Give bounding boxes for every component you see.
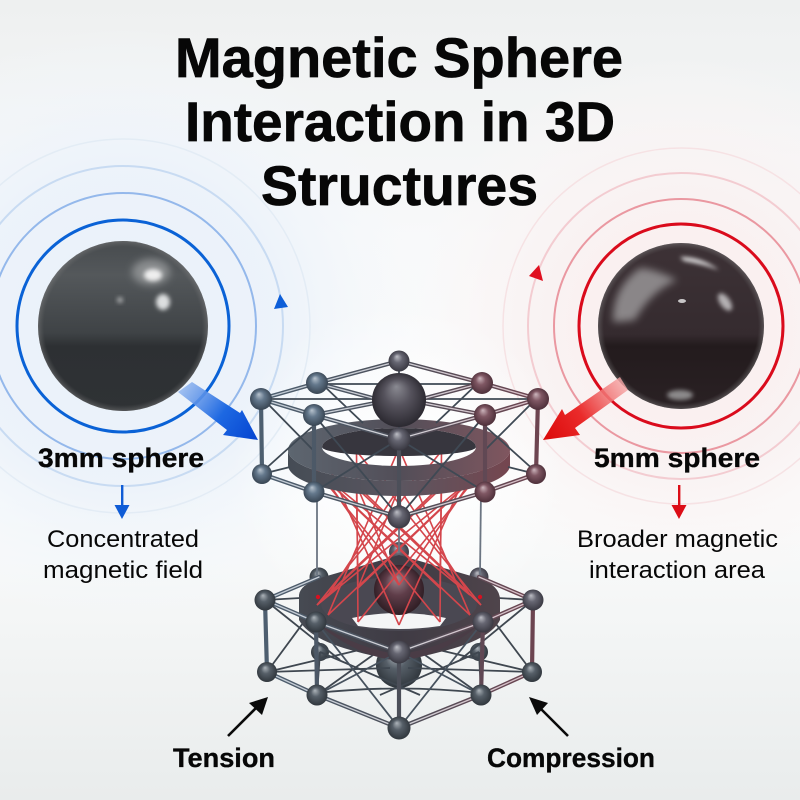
text: concentrated magnetic field: Concentrated	[47, 526, 199, 553]
upper lattice nodes	[250, 350, 549, 528]
arrow: blue down	[114, 485, 130, 519]
arrow: blue force into structure	[178, 382, 258, 440]
label: 5mm sphere: 5mm sphere	[594, 443, 760, 473]
title: Structures	[261, 154, 538, 217]
lower lattice central sphere	[374, 565, 424, 615]
label: 3mm sphere: 3mm sphere	[38, 443, 204, 473]
icon: red rotation triangle	[529, 265, 543, 281]
lower lattice thin struts	[265, 597, 533, 695]
arrow: compression	[529, 697, 568, 736]
label: tension: Tension	[173, 743, 275, 773]
arrow: tension	[228, 697, 268, 736]
lower lattice back sphere	[376, 642, 422, 688]
upper lattice thin struts	[261, 361, 538, 517]
text: broader magnetic interaction area: Broader magnetic	[577, 526, 778, 553]
3mm sphere	[38, 241, 208, 411]
title: Magnetic Sphere	[175, 26, 623, 89]
text: broader magnetic interaction area	[577, 526, 778, 584]
lower lattice nodes	[254, 590, 544, 740]
label: compression: Compression	[487, 743, 655, 773]
title: Interaction in 3D	[185, 90, 615, 153]
lower lattice main rods	[265, 577, 533, 728]
lower lattice ring	[299, 555, 500, 660]
arrow: red down	[672, 485, 686, 519]
field rings: 5mm sphere	[503, 148, 800, 504]
upper lattice central sphere	[372, 373, 426, 427]
lower lattice back nodes	[310, 542, 488, 661]
icon: blue rotation triangle	[274, 294, 288, 309]
connecting columns	[317, 492, 481, 575]
upper lattice main rods	[261, 361, 538, 517]
3D lattice structure	[250, 350, 549, 740]
tension strings	[314, 448, 484, 625]
text: concentrated magnetic field: magnetic field	[43, 557, 203, 584]
text: broader magnetic interaction area: interaction area	[589, 557, 766, 584]
field rings: 3mm sphere	[0, 139, 310, 513]
string anchor dots	[316, 595, 482, 599]
text: concentrated magnetic field	[43, 526, 203, 584]
arrow: red force into structure	[543, 377, 628, 440]
upper lattice ring	[288, 419, 510, 496]
5mm sphere	[598, 243, 764, 409]
title	[175, 26, 623, 217]
